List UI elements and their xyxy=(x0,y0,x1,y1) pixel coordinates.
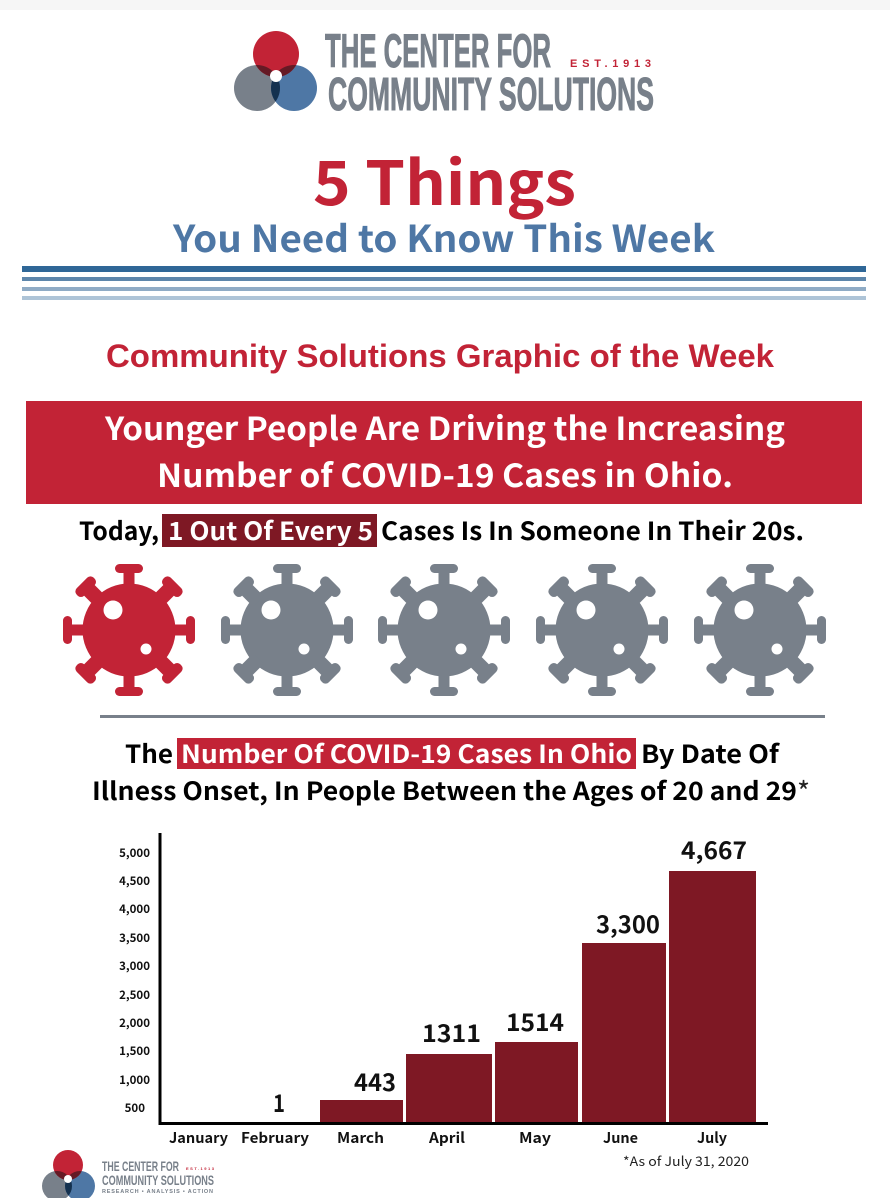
chart heading xyxy=(92,735,810,811)
footer logo: RESEARCH • ANALYSIS • ACTION xyxy=(102,1189,213,1195)
chart heading: The xyxy=(125,735,173,771)
value labels xyxy=(273,831,747,1119)
footer logo: COMMUNITY SOLUTIONS xyxy=(102,1172,214,1188)
y axis labels: 2,500 xyxy=(119,987,150,1003)
logo: The Center for Community Solutions: COMMUNITY SOLUTIONS xyxy=(328,68,654,120)
bar chart xyxy=(119,831,768,1148)
month labels: March xyxy=(337,1127,384,1148)
subtitle: You Need to Know This Week xyxy=(172,209,716,263)
y axis labels: 4,500 xyxy=(119,873,150,889)
month labels: June xyxy=(603,1127,638,1148)
month labels: July xyxy=(697,1127,728,1148)
value labels: 3,300 xyxy=(596,905,660,940)
banner: Number of COVID-19 Cases in Ohio. xyxy=(157,451,733,497)
y axis labels: 1,000 xyxy=(119,1072,150,1088)
y axis labels: 3,500 xyxy=(119,930,150,946)
chart heading: * xyxy=(797,771,810,811)
section heading: Community Solutions Graphic of the Week xyxy=(106,338,775,374)
month labels: February xyxy=(241,1127,310,1148)
chart heading: By Date Of xyxy=(641,735,781,771)
value labels: 1514 xyxy=(506,1003,564,1038)
bars xyxy=(320,871,756,1122)
chart heading: Number Of COVID-19 Cases In Ohio xyxy=(181,735,632,771)
y axis labels: 3,000 xyxy=(119,958,150,974)
logo: The Center for Community Solutions: EST.1913 xyxy=(570,58,651,70)
month labels: April xyxy=(428,1127,465,1148)
chart heading: Illness Onset, In People Between the Ages of 20 and 29 xyxy=(92,772,797,808)
icons: five viruses xyxy=(63,564,826,696)
statement: 1 out of every 5: 1 Out Of Every 5 xyxy=(168,512,373,548)
y axis labels: 4,000 xyxy=(119,901,150,917)
month labels: May xyxy=(519,1127,552,1148)
value labels: 4,667 xyxy=(681,831,747,866)
footer logo: EST.1913 xyxy=(186,1166,215,1171)
value labels: 443 xyxy=(354,1063,396,1098)
banner xyxy=(26,401,862,504)
value labels: 1311 xyxy=(422,1014,481,1049)
logo: The Center for Community Solutions: THE CENTER FOR xyxy=(325,24,551,77)
banner: Younger People Are Driving the Increasing xyxy=(104,404,785,450)
statement: 1 out of every 5: Cases Is In Someone In Their 20s. xyxy=(381,512,804,548)
y axis labels: 5,000 xyxy=(119,845,150,861)
footnote: *As of July 31, 2020 xyxy=(623,1151,749,1170)
header rules xyxy=(22,266,866,300)
statement: 1 out of every 5: Today, xyxy=(79,512,159,548)
y axis labels xyxy=(119,845,150,1116)
footer logo xyxy=(42,1150,215,1198)
month labels xyxy=(169,1127,728,1148)
logo: The Center for Community Solutions xyxy=(234,31,654,111)
y axis labels: 1,500 xyxy=(119,1043,150,1059)
month labels: January xyxy=(169,1127,229,1148)
footer logo: THE CENTER FOR xyxy=(102,1158,179,1174)
value labels: 1 xyxy=(273,1084,285,1119)
title: 5 Things: 5 Things xyxy=(313,134,576,223)
statement: 1 out of every 5 xyxy=(79,512,804,548)
axes xyxy=(160,833,768,1124)
y axis labels: 500 xyxy=(125,1100,145,1116)
y axis labels: 2,000 xyxy=(119,1015,150,1031)
